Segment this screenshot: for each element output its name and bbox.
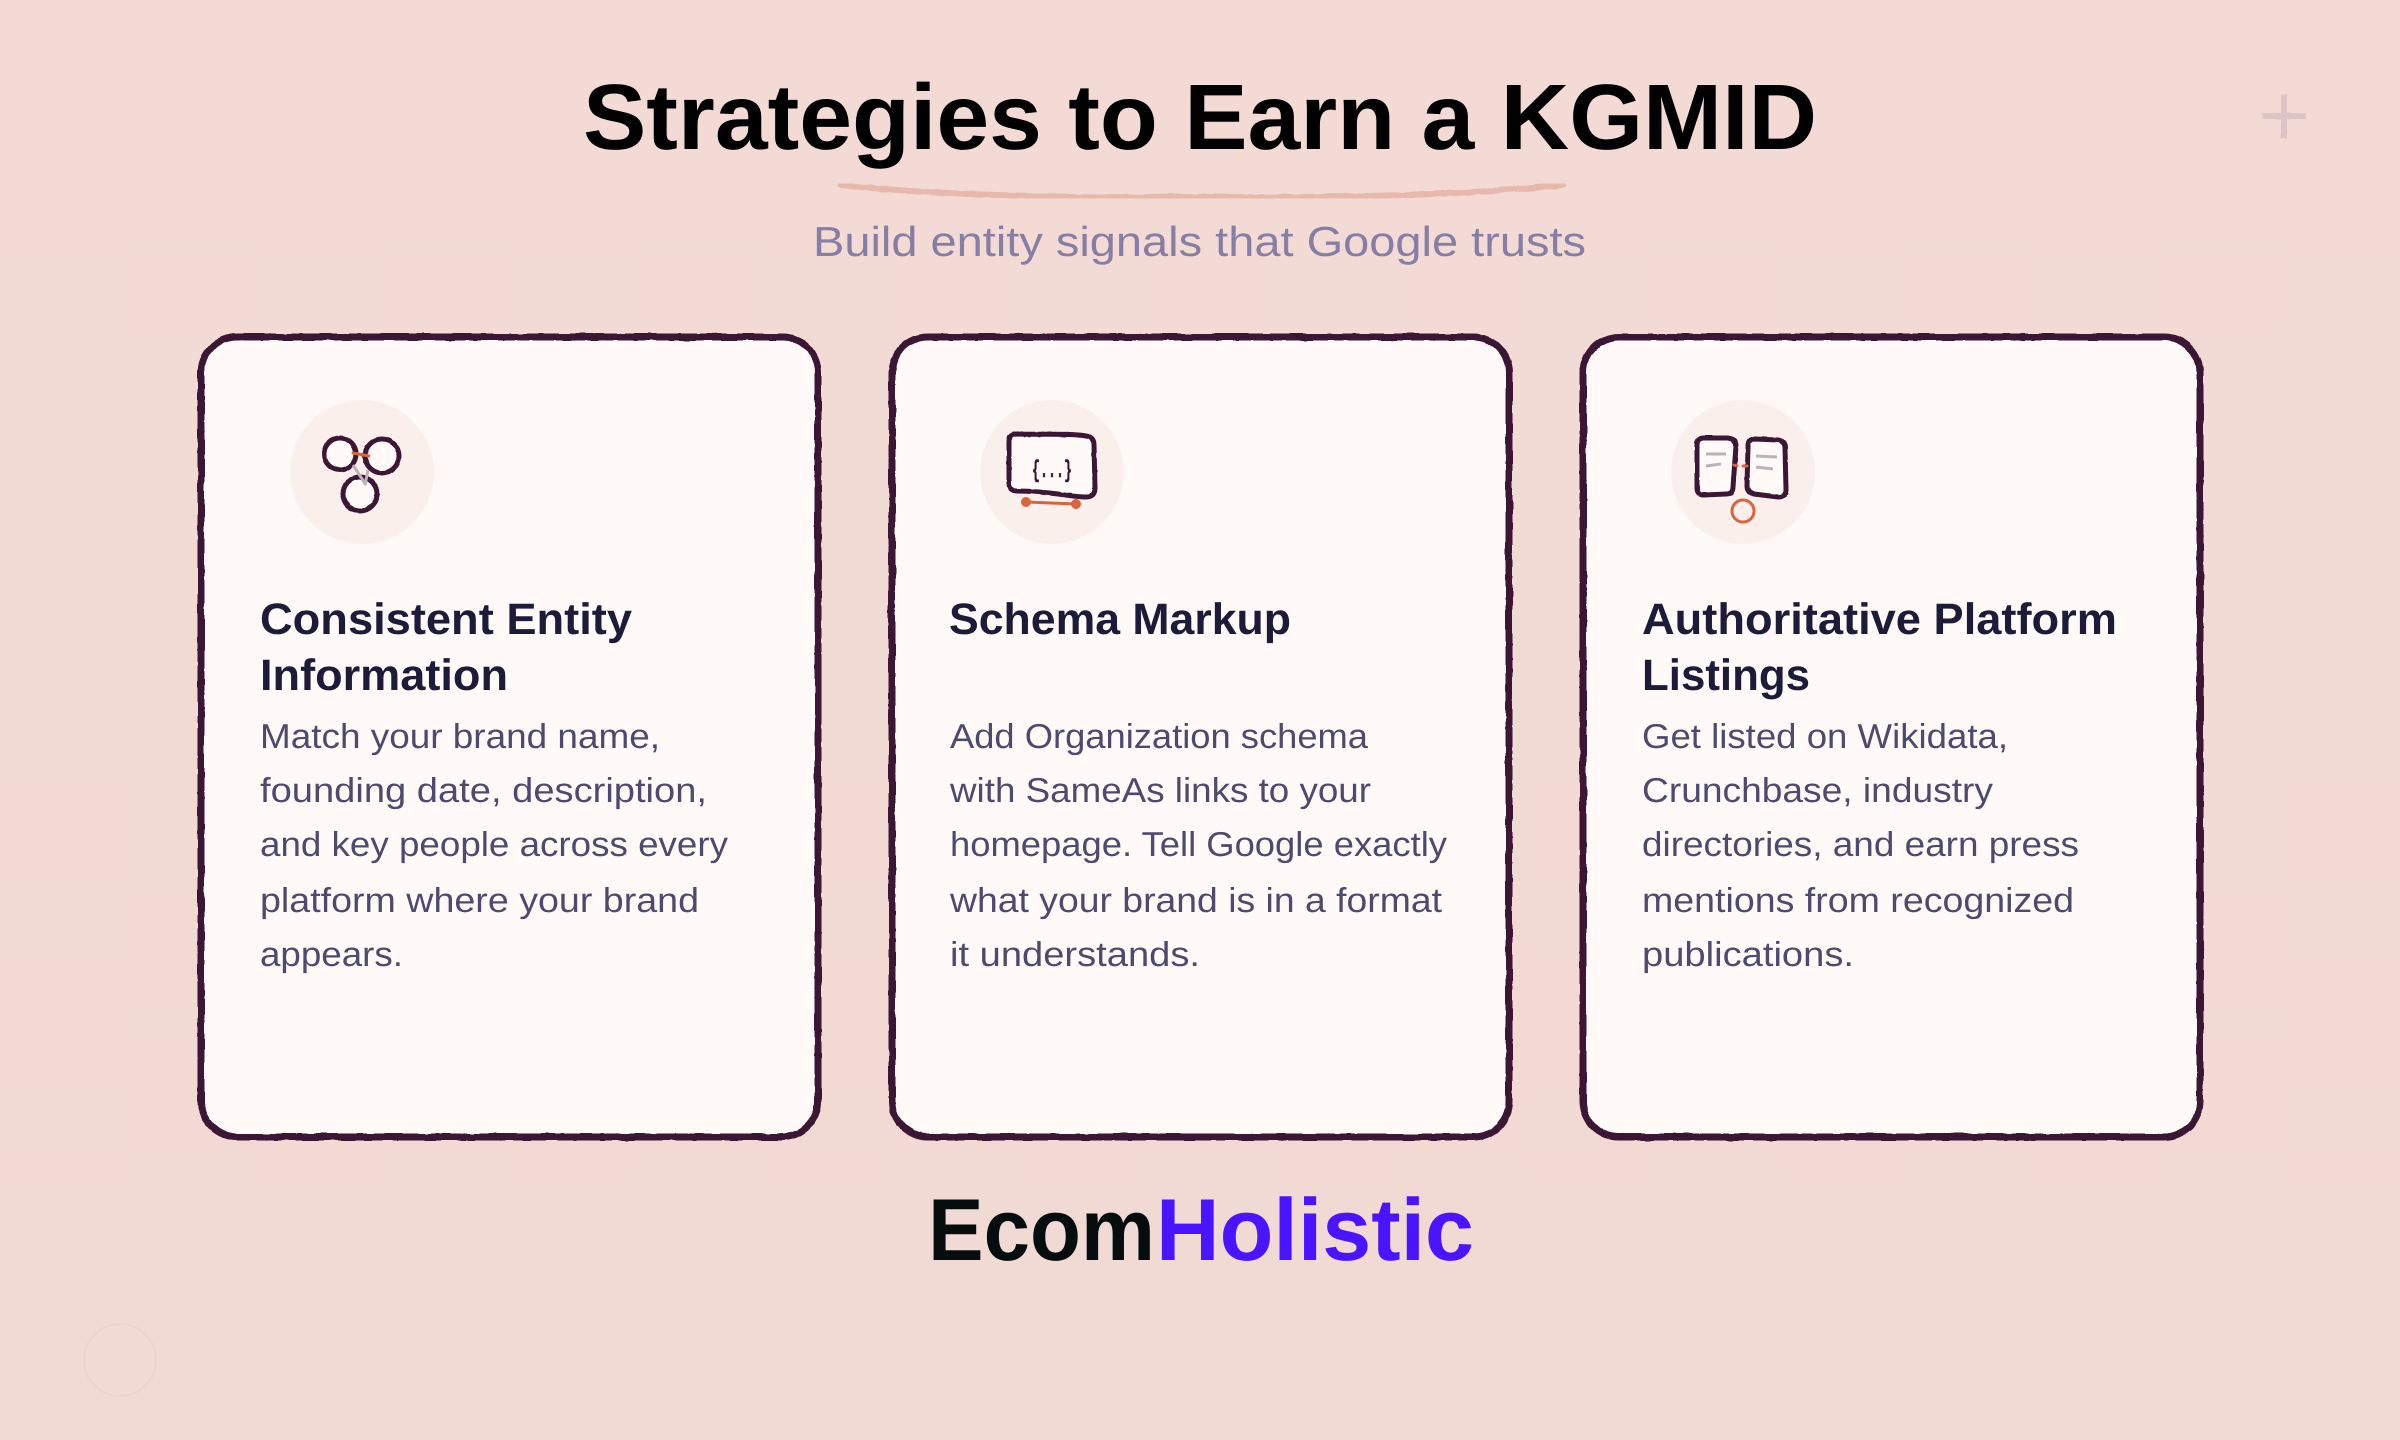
decorative circle — [84, 1324, 156, 1396]
decorative plus — [2262, 94, 2306, 138]
icon: code window — [980, 400, 1124, 544]
body text: Crunchbase, industry — [1642, 772, 1994, 810]
heading: Information — [260, 651, 508, 700]
card outline — [201, 337, 818, 1137]
heading: Authoritative Platform — [1642, 595, 2117, 644]
body text: publications. — [1642, 936, 1854, 974]
heading: Listings — [1642, 651, 1810, 700]
card outline — [892, 337, 1509, 1137]
body text: mentions from recognized — [1642, 882, 2074, 920]
card outline — [1583, 337, 2200, 1137]
body text: it understands. — [950, 936, 1200, 974]
icon: code window: {...} — [1032, 458, 1072, 485]
icon: connected circles — [290, 400, 434, 544]
title: Strategies to Earn a KGMID — [583, 65, 1817, 169]
subtitle: Build entity signals that Google trusts — [813, 218, 1586, 265]
body text: what your brand is in a format — [949, 882, 1442, 920]
body text: Get listed on Wikidata, — [1642, 718, 2008, 756]
body text: with SameAs links to your — [949, 772, 1371, 810]
logo: EcomHolistic: Holistic — [1156, 1180, 1474, 1279]
icon: listing documents — [1671, 400, 1815, 544]
body text: appears. — [260, 936, 403, 974]
panel: authoritative platform listings — [1583, 337, 2200, 1137]
heading: Consistent Entity — [260, 595, 633, 644]
body text: platform where your brand — [260, 882, 699, 920]
body text: Match your brand name, — [260, 718, 660, 756]
panel: schema markup — [892, 337, 1509, 1137]
body text: directories, and earn press — [1642, 826, 2079, 864]
heading: Schema Markup — [949, 595, 1291, 644]
body text: homepage. Tell Google exactly — [950, 826, 1448, 864]
title underline — [840, 185, 1563, 197]
panel: consistent entity information — [201, 337, 818, 1137]
body text: Add Organization schema — [950, 718, 1369, 756]
logo: EcomHolistic: Ecom — [928, 1180, 1155, 1279]
body text: and key people across every — [260, 826, 729, 864]
body text: founding date, description, — [260, 772, 707, 810]
